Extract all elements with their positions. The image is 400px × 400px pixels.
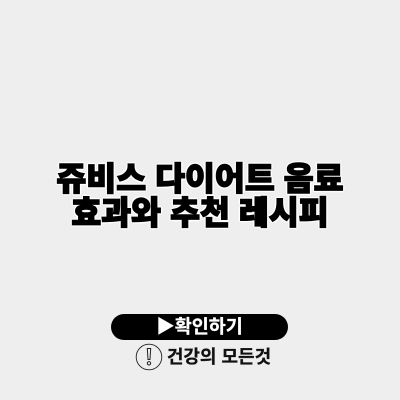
button: confirm bbox=[111, 314, 288, 340]
button: confirm: ▶확인하기 bbox=[156, 316, 243, 337]
brand text: 건강의 모든것 bbox=[167, 347, 271, 367]
title line 1: 쥬비스 다이어트 음료 bbox=[56, 161, 344, 197]
icon: exclamation circle bbox=[136, 344, 162, 370]
title line 2: 효과와 추천 레시피 bbox=[71, 195, 329, 231]
title bbox=[56, 160, 344, 231]
